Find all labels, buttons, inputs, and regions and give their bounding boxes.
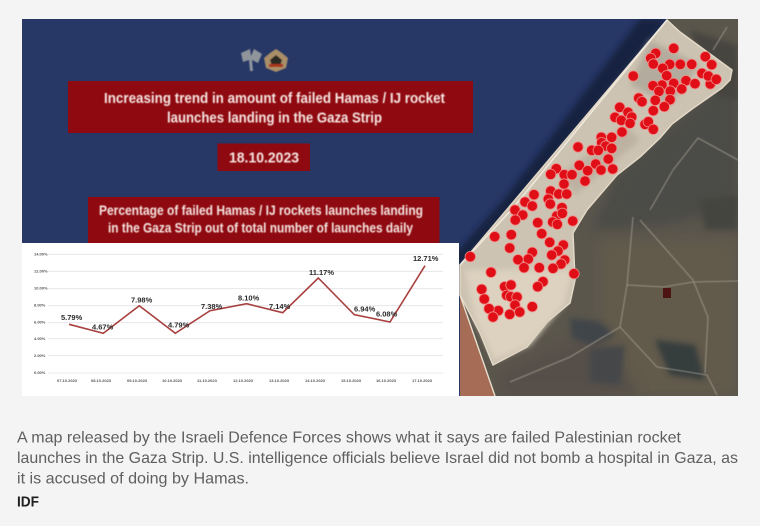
title banner: launches landing in the Gaza Strip: [167, 110, 382, 126]
y axis labels: [34, 252, 48, 375]
y axis labels: 0.00%: [34, 370, 46, 375]
caption text: it is accused of doing by Hamas.: [17, 470, 249, 487]
darker coastal water: [448, 19, 667, 265]
subtitle banner: [88, 197, 440, 243]
caption text: A map released by the Israeli Defence Forces shows what it says are failed Palestinian rocket: [17, 430, 682, 447]
dark red building marker: [663, 288, 671, 298]
y axis gridlines: [48, 254, 443, 373]
data value labels: 11.17%: [309, 268, 334, 277]
x axis date labels: 10.10.2023: [162, 378, 183, 383]
data value labels: 7.14%: [269, 302, 291, 311]
data value labels: [61, 254, 439, 332]
egyptian land: [460, 295, 495, 396]
data value labels: 7.38%: [201, 302, 223, 311]
caption text: launches in the Gaza Strip. U.S. intelligence officials believe Israel did not bomb a hospital in Gaza, as: [17, 450, 738, 467]
roads: [510, 27, 738, 395]
y axis labels: 14.00%: [34, 252, 48, 256]
data value labels: 5.79%: [61, 313, 83, 322]
x axis date labels: 12.10.2023: [233, 378, 254, 383]
y axis labels: 8.00%: [34, 302, 46, 308]
y axis labels: 10.00%: [34, 286, 48, 290]
y axis labels: 4.00%: [34, 336, 46, 341]
egypt border: [460, 295, 495, 396]
title banner: [68, 81, 473, 133]
sea background: [22, 19, 738, 396]
rocket impact dots: [465, 43, 722, 322]
x axis date labels: 09.10.2023: [127, 378, 148, 383]
x axis date labels: 17.10.2023: [412, 378, 433, 383]
data line: [69, 266, 425, 333]
y axis labels: 6.00%: [34, 320, 46, 324]
x axis date labels: 08.10.2023: [91, 378, 112, 383]
data value labels: 6.94%: [354, 304, 376, 314]
data value labels: 8.10%: [238, 294, 260, 302]
x axis date labels: 14.10.2023: [305, 378, 326, 383]
y axis labels: 2.00%: [34, 353, 46, 358]
line chart panel: [22, 243, 459, 396]
subtitle banner: Percentage of failed Hamas / IJ rockets launches landing: [99, 202, 423, 218]
gaza strip land: [460, 20, 732, 365]
data value labels: 4.79%: [168, 320, 190, 330]
y axis labels: 12.00%: [34, 268, 48, 274]
caption text: [17, 430, 738, 487]
icon: idf emblem: [264, 49, 288, 72]
israeli land terrain: [460, 19, 738, 396]
data value labels: 4.67%: [92, 322, 114, 332]
date banner: 18.10.2023: [229, 150, 299, 166]
x axis date labels: 16.10.2023: [376, 378, 397, 383]
x axis date labels: 07.10.2023: [57, 378, 78, 383]
title banner: Increasing trend in amount of failed Hamas / IJ rocket: [104, 90, 445, 107]
coastline: [460, 20, 667, 265]
icon: air force emblem: [241, 49, 262, 71]
map image panel: [22, 19, 738, 396]
x axis date labels: [57, 378, 433, 383]
x axis date labels: 15.10.2023: [341, 378, 362, 383]
subtitle banner: in the Gaza Strip out of total number of launches daily: [108, 220, 413, 236]
data value labels: 7.98%: [131, 296, 153, 304]
x axis date labels: 13.10.2023: [269, 378, 290, 383]
data value labels: 12.71%: [413, 254, 439, 263]
image credit: IDF: [17, 495, 39, 511]
data value labels: 6.08%: [376, 310, 398, 318]
date banner: [218, 144, 310, 171]
x axis date labels: 11.10.2023: [197, 378, 218, 383]
